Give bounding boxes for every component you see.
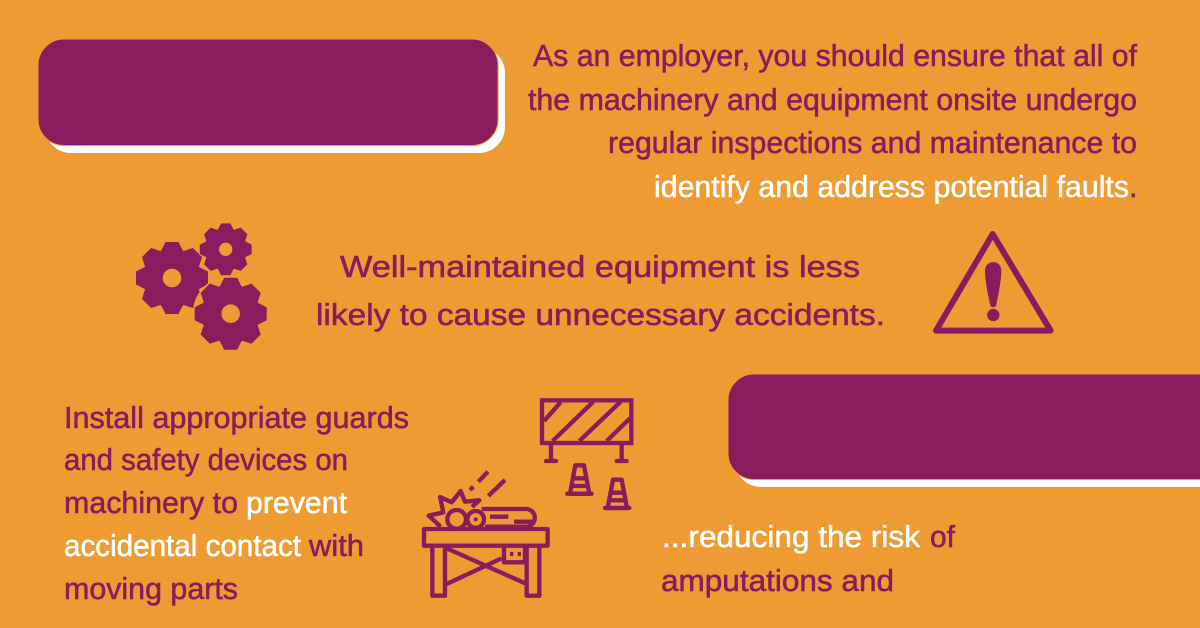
text block: reducing the risk: amputations and	[661, 563, 894, 598]
text block: well-maintained equipment: Well-maintained equipment is less	[340, 249, 860, 284]
text block: employer inspection advice: As an employer, you should ensure that all of	[533, 38, 1137, 73]
text block: well-maintained equipment	[316, 249, 885, 332]
text block: guards and safety devices: prevent	[246, 485, 347, 520]
text block: guards and safety devices: Install appropriate guards	[64, 400, 409, 435]
panel: right banner	[728, 374, 1200, 487]
text block: reducing the risk: ...reducing the risk	[662, 519, 920, 554]
text block: employer inspection advice	[528, 38, 1138, 204]
icon: circular saw table	[424, 472, 548, 596]
text block: reducing the risk	[661, 519, 955, 598]
text block: employer inspection advice: identify and address potential faults	[654, 169, 1129, 204]
text block: guards and safety devices	[64, 400, 409, 606]
text block: employer inspection advice: .	[1129, 169, 1138, 204]
text block: employer inspection advice: regular inspections and maintenance to	[608, 125, 1137, 160]
text block: guards and safety devices: machinery to	[64, 485, 238, 520]
text block: guards and safety devices: accidental contact	[64, 528, 301, 563]
text block: guards and safety devices: moving parts	[64, 571, 238, 606]
text block: well-maintained equipment: likely to cause unnecessary accidents.	[316, 297, 885, 332]
text block: employer inspection advice: the machinery and equipment onsite undergo	[528, 82, 1137, 117]
text block: guards and safety devices: and safety devices on	[64, 442, 348, 477]
panel: top left banner	[38, 39, 505, 153]
text block: guards and safety devices: with	[308, 528, 364, 563]
icon: road barrier and cones	[542, 400, 631, 508]
icon: warning triangle	[936, 234, 1051, 331]
text block: reducing the risk: of	[930, 519, 955, 554]
icon: gears	[136, 223, 269, 352]
